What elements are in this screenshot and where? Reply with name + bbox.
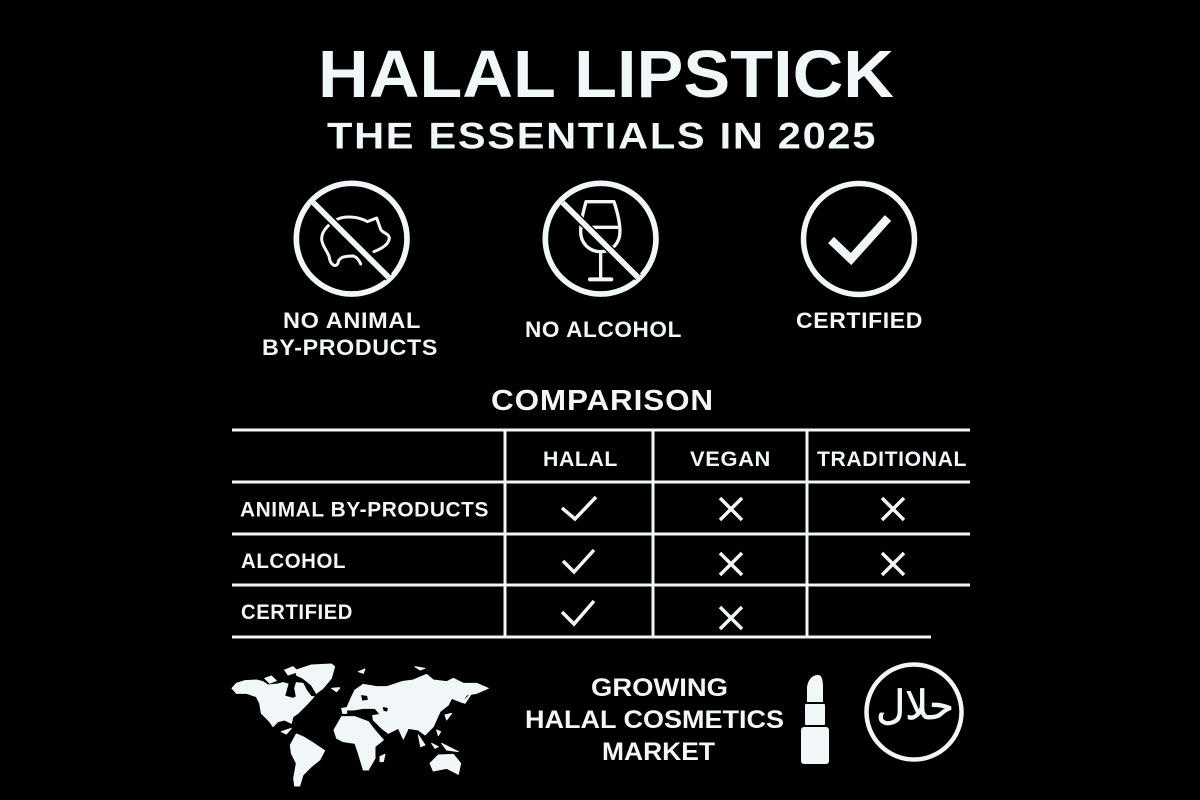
text: growing halal cosmetics market: GROWING — [591, 674, 728, 702]
icon: no alcohol — [545, 183, 656, 294]
icon: no animal by-products — [296, 183, 407, 294]
table marks: halal checks — [562, 497, 596, 624]
column header: halal: HALAL — [543, 448, 618, 471]
row label: certified: CERTIFIED — [241, 601, 353, 624]
icon: certified — [804, 184, 914, 294]
label: no alcohol: NO ALCOHOL — [525, 317, 682, 342]
icon: halal badge: حلال — [876, 683, 954, 729]
comparison table — [232, 430, 970, 637]
title: HALAL LIPSTICK — [318, 37, 894, 112]
world map — [232, 664, 488, 786]
row label: alcohol: ALCOHOL — [241, 550, 346, 573]
column header: vegan: VEGAN — [690, 448, 771, 471]
icon: lipstick — [801, 675, 829, 764]
label: no animal by-products: NO ANIMAL — [283, 308, 421, 333]
icon: halal badge — [866, 664, 962, 760]
subtitle: THE ESSENTIALS IN 2025 — [327, 116, 877, 156]
label: no animal by-products — [262, 308, 438, 360]
text: growing halal cosmetics market: MARKET — [602, 738, 715, 766]
label: no animal by-products: BY-PRODUCTS — [262, 335, 438, 360]
column header: traditional: TRADITIONAL — [817, 448, 967, 471]
table marks: vegan crosses — [720, 498, 742, 629]
label: certified: CERTIFIED — [796, 308, 923, 333]
text: growing halal cosmetics market: HALAL COSMETICS — [525, 706, 784, 734]
text: growing halal cosmetics market — [525, 674, 784, 766]
heading: comparison: COMPARISON — [491, 385, 714, 417]
table marks: traditional crosses — [882, 498, 904, 575]
row label: animal by-products: ANIMAL BY-PRODUCTS — [240, 498, 489, 522]
